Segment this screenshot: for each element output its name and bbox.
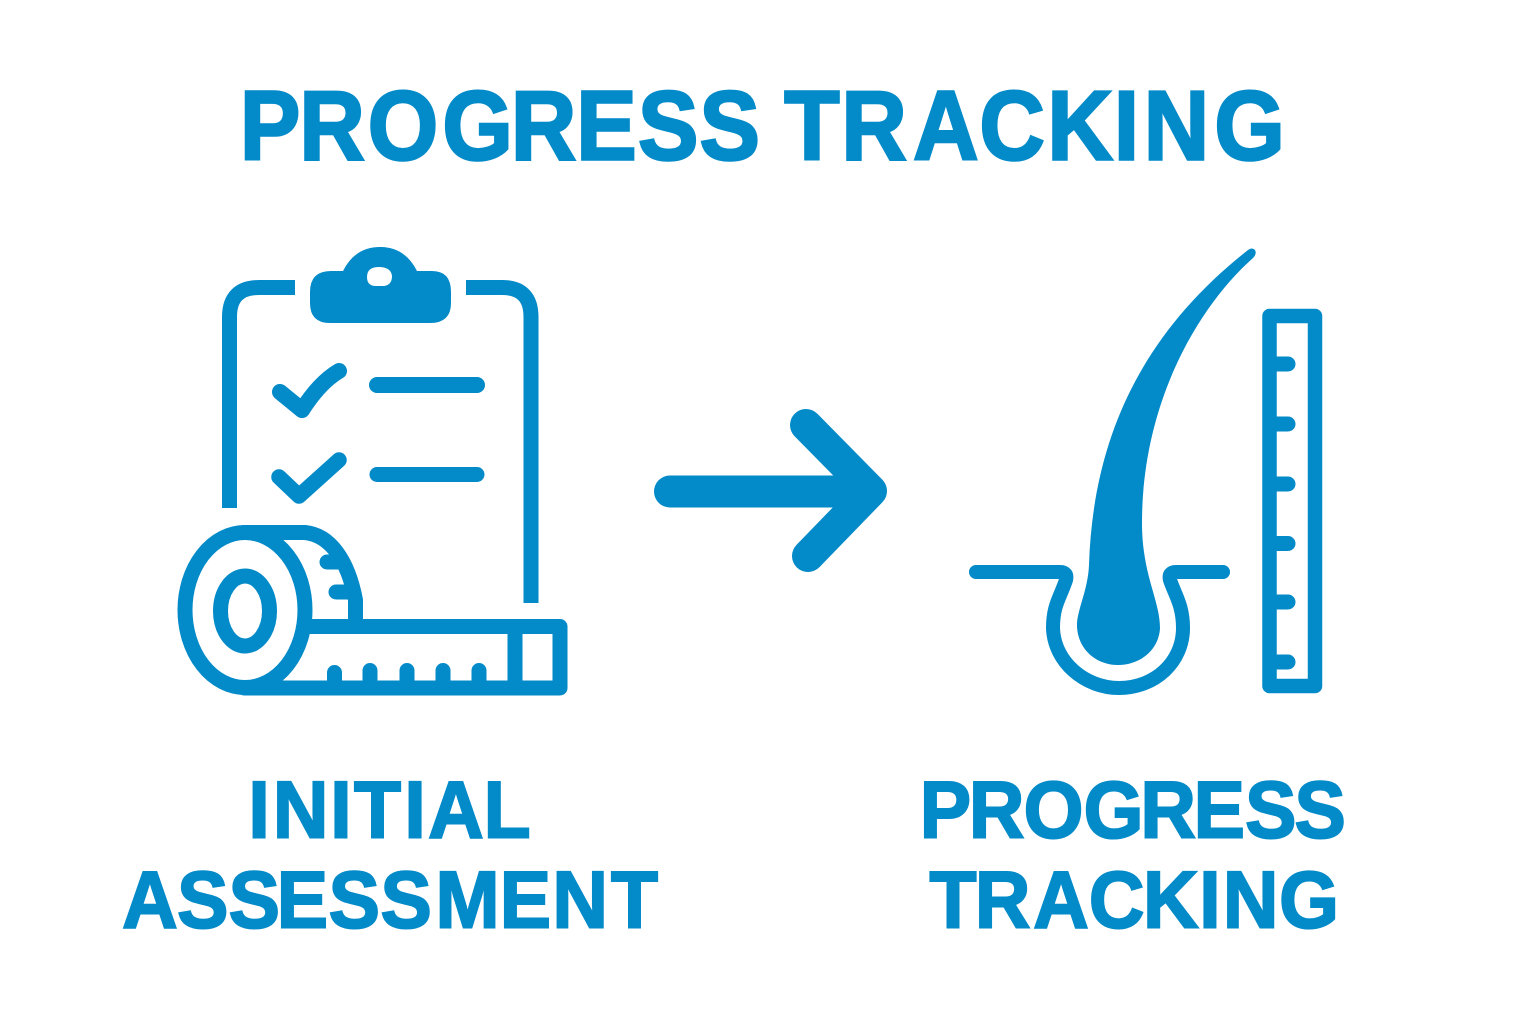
list line 2 [377,467,477,482]
tape end mark [508,630,522,684]
icon: measuring tape [185,532,560,688]
arrow [670,425,871,556]
check mark 2 [279,460,339,496]
tape roll body [244,532,356,625]
ruler ticks [1275,364,1288,662]
icon: hair follicle [976,248,1256,688]
label: initial assessment: INITIAL [248,764,531,855]
clipboard clip [310,247,451,323]
label: initial assessment: ASSESSMENT [122,854,658,945]
label: initial assessment [122,764,658,945]
tape ticks [327,562,479,684]
skin and follicle outline [976,572,1223,688]
hair shaft and bulb [1077,248,1256,665]
tape roll outer [185,532,305,688]
tape roll inner [220,576,270,646]
icon: clipboard with checklist [230,247,531,603]
label: progress tracking: TRACKING [929,854,1339,945]
label: progress tracking [920,764,1346,945]
tape strip [244,626,560,688]
icon: vertical ruler [1270,316,1315,686]
label: progress tracking: PROGRESS [920,764,1346,855]
ruler frame [1270,316,1315,686]
check mark 1 [280,371,339,410]
title: PROGRESS TRACKING [240,71,1285,181]
clipboard outline [230,288,531,603]
list line 1 [377,377,477,393]
